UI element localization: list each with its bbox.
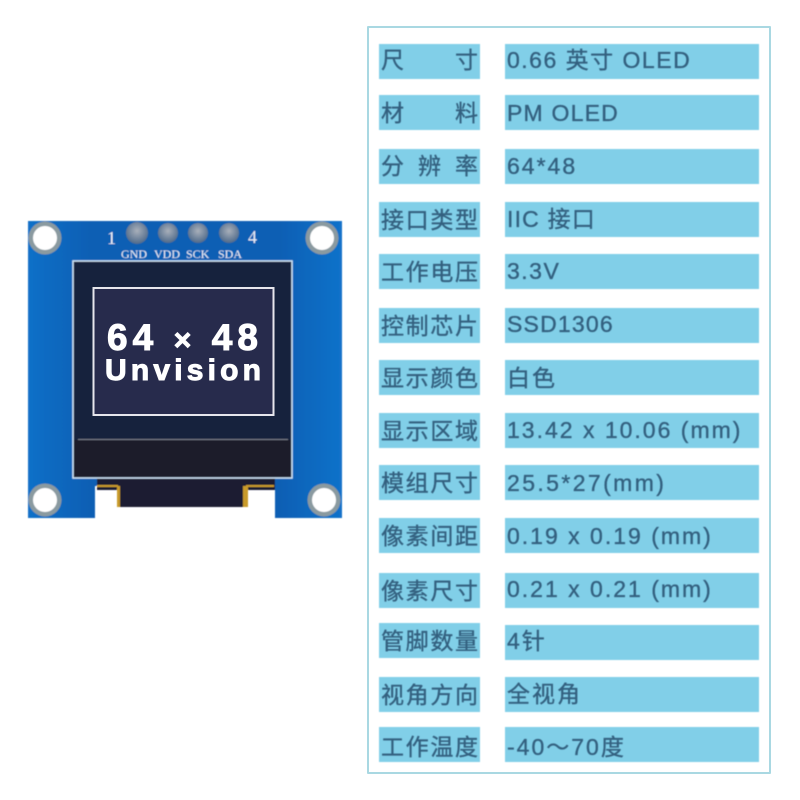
row: resolution: 率 [455, 153, 478, 179]
row: controller: 制 [406, 313, 429, 339]
row: viewing angle [379, 677, 480, 712]
row: pixel size [379, 573, 480, 608]
row: voltage: 电 [430, 259, 453, 285]
row: voltage: 作 [406, 259, 429, 285]
value: display area: 13.42 x 10.06 (mm) [507, 417, 742, 443]
row: viewing angle: 向 [455, 682, 478, 708]
row: pin count: 管 [381, 628, 404, 654]
row: voltage: 工 [381, 259, 404, 285]
value: size: 0.66 英寸 OLED [507, 47, 691, 73]
header pins [126, 222, 239, 244]
row: module size: 组 [406, 470, 429, 496]
row: display area [379, 413, 480, 448]
value: material: PM OLED [507, 100, 619, 126]
pin labels: SCK [186, 247, 210, 261]
value: controller: SSD1306 [507, 311, 614, 337]
pin labels [107, 227, 257, 261]
row: size: 尺 [381, 47, 404, 73]
value: colour [505, 360, 759, 395]
row: viewing angle: 视 [381, 682, 404, 708]
row: pixel size: 像 [381, 578, 404, 604]
row: pin count: 量 [455, 628, 478, 654]
row: voltage: 压 [455, 259, 478, 285]
value: controller [505, 308, 759, 343]
row: pixel pitch [379, 518, 480, 553]
row: voltage [379, 254, 480, 289]
OLED glass [73, 261, 292, 478]
row: colour: 显 [381, 365, 404, 391]
row: pin count [379, 623, 480, 658]
display text: Unvision [105, 354, 261, 387]
row: module size: 尺 [430, 470, 453, 496]
circuit board [28, 221, 342, 518]
row: temperature: 工 [381, 734, 404, 760]
row: pin count: 脚 [406, 628, 429, 654]
value: temperature: -40～70度 [507, 734, 626, 760]
row: pixel pitch: 间 [430, 523, 453, 549]
product photo: OLED module [27, 220, 343, 519]
value: pixel pitch: 0.19 x 0.19 (mm) [507, 523, 713, 549]
row: pixel size: 素 [406, 578, 429, 604]
value: pixel pitch [505, 518, 759, 553]
row: interface: 接 [381, 207, 404, 233]
row: interface: 类 [430, 207, 453, 233]
row: interface: 口 [406, 207, 429, 233]
row: display area: 区 [430, 418, 453, 444]
row: interface: 型 [455, 207, 478, 233]
row: module size: 寸 [455, 470, 478, 496]
pin labels: SDA [218, 247, 242, 261]
mounting holes [28, 222, 340, 516]
flex cable [97, 478, 275, 507]
row: resolution: 辨 [418, 153, 441, 179]
value: voltage: 3.3V [507, 258, 560, 284]
row: module size: 模 [381, 470, 404, 496]
value: voltage [505, 254, 759, 289]
display text [105, 317, 261, 387]
row: pixel size: 尺 [430, 578, 453, 604]
row: resolution: 分 [381, 153, 404, 179]
row: pin count: 数 [430, 628, 453, 654]
row: pixel pitch: 素 [406, 523, 429, 549]
value: size [505, 44, 759, 79]
value: colour: 白色 [507, 365, 557, 391]
value: interface: IIC 接口 [507, 206, 596, 232]
value: pin count: 4针 [507, 628, 547, 654]
row: material: 料 [455, 100, 478, 126]
row: temperature: 度 [455, 734, 478, 760]
row: viewing angle: 角 [406, 682, 429, 708]
row: colour [379, 360, 480, 395]
display frame [94, 288, 274, 415]
row: pixel size: 寸 [455, 578, 478, 604]
value: temperature [505, 727, 759, 762]
row: size [379, 44, 480, 79]
row: display area: 域 [455, 418, 478, 444]
row: resolution [379, 149, 480, 184]
row: colour: 色 [455, 365, 478, 391]
value: module size [505, 465, 759, 500]
row: display area: 显 [381, 418, 404, 444]
display text: 64 × 48 [107, 317, 258, 358]
row: controller [379, 308, 480, 343]
row: display area: 示 [406, 418, 429, 444]
row: colour: 示 [406, 365, 429, 391]
pin labels: VDD [154, 247, 180, 261]
spec table frame [367, 26, 771, 774]
value: viewing angle [505, 677, 759, 712]
value: pixel size [505, 573, 759, 608]
row: module size [379, 465, 480, 500]
row: material [379, 95, 480, 130]
row: interface [379, 202, 480, 237]
pin labels: GND [121, 247, 147, 261]
row: pixel pitch: 距 [455, 523, 478, 549]
row: controller: 控 [381, 313, 404, 339]
value: material [505, 95, 759, 130]
value: display area [505, 413, 759, 448]
row: controller: 片 [455, 313, 478, 339]
value: viewing angle: 全视角 [507, 681, 582, 707]
row: material: 材 [381, 100, 404, 126]
row: size: 寸 [455, 47, 478, 73]
row: temperature: 温 [430, 734, 453, 760]
value: interface [505, 202, 759, 237]
pin labels: 1 [107, 228, 116, 248]
row: viewing angle: 方 [430, 682, 453, 708]
value: pin count [505, 625, 759, 660]
row: temperature [379, 727, 480, 762]
value: resolution [505, 149, 759, 184]
row: temperature: 作 [406, 734, 429, 760]
row: pixel pitch: 像 [381, 523, 404, 549]
row: controller: 芯 [430, 313, 453, 339]
value: resolution: 64*48 [507, 153, 577, 179]
pin labels: 4 [248, 227, 257, 247]
value: module size: 25.5*27(mm) [507, 470, 666, 496]
value: pixel size: 0.21 x 0.21 (mm) [507, 576, 713, 602]
row: colour: 颜 [430, 365, 453, 391]
